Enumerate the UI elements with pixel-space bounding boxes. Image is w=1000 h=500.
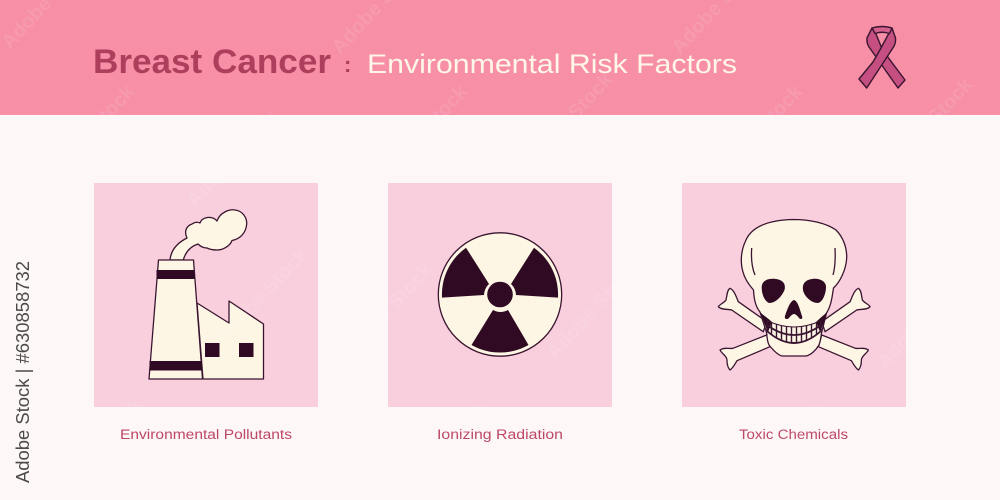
stock watermarks: Adobe Stock — [543, 258, 643, 363]
label: ionizing radiation: Ionizing Radiation — [437, 427, 563, 442]
title: Breast Cancer — [93, 43, 331, 81]
stock watermarks: Adobe Stock — [183, 106, 283, 211]
header band — [0, 0, 1000, 115]
title — [93, 43, 737, 81]
stock watermarks: Adobe Stock — [40, 80, 140, 185]
panel: ionizing radiation — [388, 183, 612, 407]
stock watermarks: Adobe Stock — [338, 258, 438, 363]
stock watermarks: Adobe Stock — [373, 80, 473, 185]
label: environmental pollutants: Environmental Pollutants — [120, 427, 292, 442]
stock watermarks: Adobe Stock — [518, 68, 618, 173]
label: toxic chemicals: Toxic Chemicals — [739, 427, 848, 442]
icon: factory — [149, 210, 264, 379]
stock watermarks: Adobe Stock — [878, 73, 978, 178]
stock watermarks: Adobe Stock — [708, 80, 808, 185]
icon: radiation symbol — [438, 233, 562, 356]
stock watermarks: Adobe Stock — [48, 393, 148, 498]
panel: environmental pollutants — [94, 183, 318, 407]
icon: skull and crossbones — [718, 220, 870, 370]
icon: pink ribbon — [859, 26, 905, 88]
title: : — [344, 52, 351, 77]
stock watermarks: Adobe Stock — [213, 243, 313, 348]
panel: toxic chemicals — [682, 183, 906, 407]
stock watermarks: Adobe Stock — [873, 268, 973, 373]
stock image id: Adobe Stock | #630858732 — [13, 261, 33, 483]
title: Environmental Risk Factors — [367, 49, 737, 79]
